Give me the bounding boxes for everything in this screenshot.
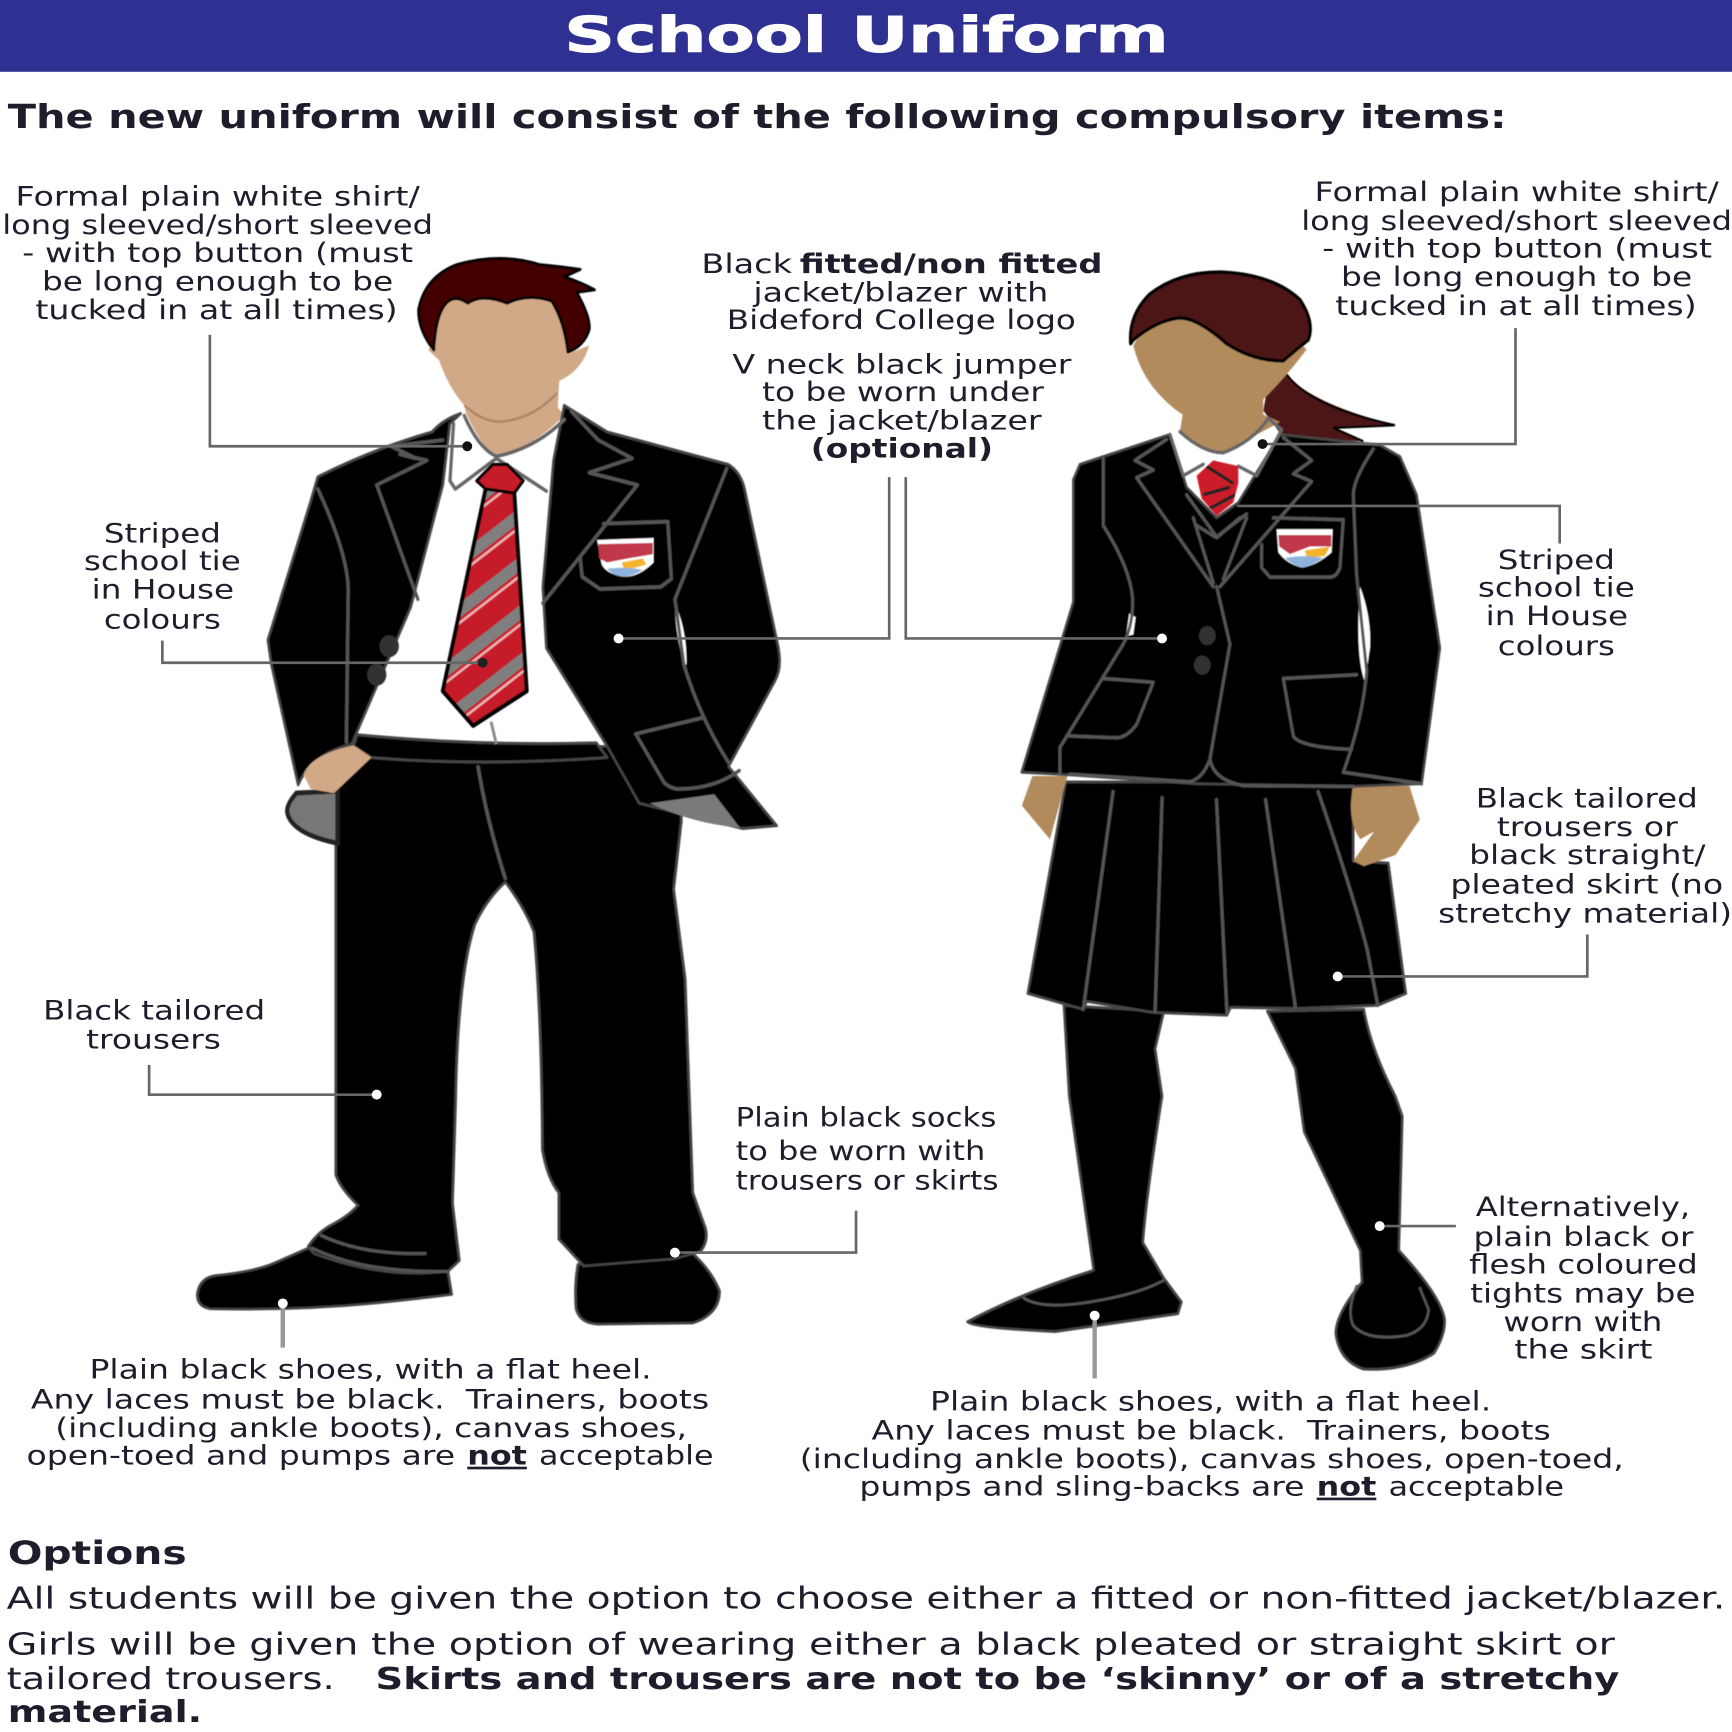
callout: female tie: in House: [1486, 601, 1628, 632]
male figure: [197, 258, 780, 1324]
callout: male shoes: (including ankle boots), canvas shoes,: [55, 1413, 687, 1444]
leader line: male tie: [162, 641, 488, 668]
shirt collar: [450, 416, 564, 491]
callout: male tie: in House: [92, 575, 234, 606]
leader line: female shirt: [1258, 328, 1516, 449]
male upper body: [268, 258, 780, 843]
hair: [418, 258, 595, 352]
right jacket details: [543, 411, 739, 789]
callout: female shirt: long sleeved/short sleeved: [1301, 206, 1732, 237]
school crest: [597, 538, 654, 577]
options paragraph 2: Skirts and trousers are not to be ‘skinny’ or of a stretchy: [376, 1662, 1619, 1697]
callout: male shoes: not: [467, 1441, 527, 1472]
callout: male trousers: [43, 996, 265, 1055]
callout: jacket: [701, 249, 1102, 336]
callout: male trousers: trousers: [86, 1024, 221, 1055]
callout: female shirt: tucked in at all times): [1335, 291, 1697, 322]
tie knot: [477, 465, 523, 493]
trousers: [308, 746, 706, 1273]
callout: female tie: [1478, 545, 1635, 662]
options paragraph 2: [7, 1628, 1619, 1730]
leader line: tights: [1375, 1221, 1456, 1231]
school tie: [1197, 460, 1238, 516]
callout: male shirt: Formal plain white shirt/: [15, 181, 420, 212]
leader line: socks: [670, 1211, 856, 1258]
options heading: Options: [8, 1534, 187, 1572]
callout: male shoes: Any laces must be black. Trainers, boots: [31, 1384, 709, 1415]
right leg and shoe: [1267, 1009, 1445, 1369]
callout: trousers or skirt: Black tailored: [1476, 783, 1698, 814]
callout: tights: tights may be: [1470, 1278, 1696, 1309]
callout: trousers or skirt: black straight/: [1469, 840, 1706, 871]
title: School Uniform: [564, 8, 1169, 64]
callout: female tie: colours: [1498, 631, 1615, 662]
female upper body: [1022, 272, 1440, 786]
leader line: skirt: [1333, 934, 1587, 981]
left jacket: [268, 413, 461, 785]
right hand: [1351, 786, 1420, 866]
callout: male trousers: Black tailored: [43, 996, 265, 1027]
callout: female shirt: - with top button (must: [1322, 233, 1712, 264]
callout: female shoes: Plain black shoes, with a flat heel.: [930, 1387, 1491, 1418]
subheading: The new uniform will consist of the following compulsory items:: [8, 97, 1507, 136]
header banner: [0, 0, 1732, 72]
callout: female shoes: acceptable: [1388, 1472, 1564, 1503]
male trousers and shoes: [197, 746, 720, 1324]
callout: female shirt: Formal plain white shirt/: [1314, 177, 1719, 208]
waistband: [354, 735, 607, 762]
shirt placket: [491, 722, 496, 744]
callout: socks: Plain black socks: [736, 1103, 996, 1134]
callout: jumper: V neck black jumper: [732, 349, 1072, 380]
callout: socks: [736, 1103, 999, 1197]
callout: tights: the skirt: [1514, 1335, 1652, 1366]
options section: [7, 1534, 1725, 1730]
callout: tights: Alternatively,: [1476, 1192, 1690, 1223]
callout: tights: flesh coloured: [1469, 1250, 1698, 1281]
options paragraph 1: All students will be given the option to choose either a fitted or non-fitted jacket/blazer.: [7, 1581, 1725, 1616]
callout: male shoes: Plain black shoes, with a flat heel.: [89, 1355, 652, 1386]
jacket buttons: [1194, 626, 1216, 675]
callout: socks: to be worn with: [736, 1136, 985, 1167]
callout: male shoes: open-toed and pumps are: [27, 1441, 455, 1472]
shirt collar: [1170, 418, 1282, 476]
left hand: [1022, 776, 1067, 839]
jacket: [1022, 434, 1440, 786]
callout: jumper: (optional): [811, 433, 993, 464]
callout: female shoes: (including ankle boots), canvas shoes, open-toed,: [800, 1444, 1624, 1475]
callout: female shoes: Any laces must be black. Trainers, boots: [872, 1415, 1551, 1446]
options paragraph 2: material.: [8, 1695, 202, 1730]
callout: female shirt: [1301, 177, 1732, 322]
callout: socks: trousers or skirts: [736, 1166, 999, 1197]
callout: jacket: jacket/blazer with: [752, 278, 1048, 309]
lapels and vest: [1135, 437, 1312, 587]
right shoe: [575, 1253, 720, 1324]
leader line: female shoes: [1090, 1311, 1100, 1379]
skirt pleats: [1083, 792, 1378, 1013]
leader line: male shirt: [210, 335, 472, 451]
callout: male tie: Striped: [104, 518, 221, 549]
hand: [304, 745, 371, 793]
options paragraph 2: tailored trousers.: [7, 1662, 335, 1697]
leader line: male shoes: [278, 1298, 288, 1348]
callout: jumper: the jacket/blazer: [762, 406, 1042, 437]
sleeve and front seams: [1060, 449, 1422, 786]
female skirt and legs: [967, 776, 1445, 1369]
callout: jacket: Bideford College logo: [727, 305, 1076, 336]
options paragraph 2: Girls will be given the option of wearing either a black pleated or straight skirt or: [7, 1628, 1616, 1663]
callout: male shirt: long sleeved/short sleeved: [2, 210, 433, 241]
left pocket lining: [287, 791, 337, 843]
callout: female tie: school tie: [1478, 572, 1635, 603]
callout: trousers or skirt: stretchy material): [1438, 898, 1732, 929]
female figure: [967, 272, 1445, 1369]
callout: male shoes: [27, 1355, 714, 1472]
callout: male shirt: tucked in at all times): [35, 295, 398, 326]
pockets: [1068, 518, 1357, 749]
face and neck: [1133, 307, 1307, 453]
callout: trousers or skirt: trousers or: [1497, 812, 1678, 843]
callout: male shirt: - with top button (must: [22, 238, 413, 269]
callout: female shoes: [800, 1387, 1624, 1503]
right pocket lining: [650, 794, 740, 828]
callout: male shoes: acceptable: [539, 1441, 714, 1472]
callout: male shirt: [2, 181, 433, 326]
chin line: [464, 393, 557, 422]
neck and face: [429, 289, 589, 456]
callout: trousers or skirt: [1438, 783, 1732, 929]
school crest: [1277, 529, 1333, 568]
callout: female shoes: pumps and sling-backs are: [859, 1472, 1305, 1503]
sleeve gaps: [1126, 587, 1370, 682]
left leg and shoe: [967, 1005, 1181, 1332]
right jacket: [543, 405, 780, 829]
callout: male tie: [84, 518, 241, 636]
leader line: female jacket: [906, 477, 1167, 643]
hair: [1130, 272, 1310, 361]
callout: tights: [1469, 1192, 1698, 1366]
left jacket details: [318, 440, 443, 742]
callout: female shirt: be long enough to be: [1341, 262, 1692, 293]
callout: jacket: fitted/non fitted: [800, 249, 1102, 280]
ponytail: [1263, 374, 1395, 441]
callout: jumper: [732, 349, 1072, 464]
callout: jacket: Black: [701, 249, 793, 280]
callout: tights: plain black or: [1474, 1222, 1693, 1253]
leader line: trousers: [149, 1065, 382, 1100]
callout: male shirt: be long enough to be: [42, 267, 393, 298]
trouser creases: [312, 767, 505, 1271]
callout: female tie: Striped: [1498, 545, 1615, 576]
left shoe: [197, 1248, 452, 1309]
leader line: female tie: [1237, 506, 1560, 543]
callout: tights: worn with: [1503, 1307, 1662, 1338]
callout: male tie: school tie: [84, 546, 241, 577]
callout: female shoes: not: [1317, 1472, 1377, 1503]
callout: trousers or skirt: pleated skirt (no: [1450, 870, 1723, 901]
school tie: [440, 462, 530, 729]
skirt: [1028, 782, 1406, 1015]
callout: male tie: colours: [104, 605, 221, 636]
callout: jumper: to be worn under: [762, 377, 1044, 408]
jacket buttons: [367, 635, 399, 686]
sleeve gap: [675, 603, 686, 665]
shoe lines: [1024, 1280, 1429, 1337]
leader line: male jacket: [614, 477, 889, 643]
